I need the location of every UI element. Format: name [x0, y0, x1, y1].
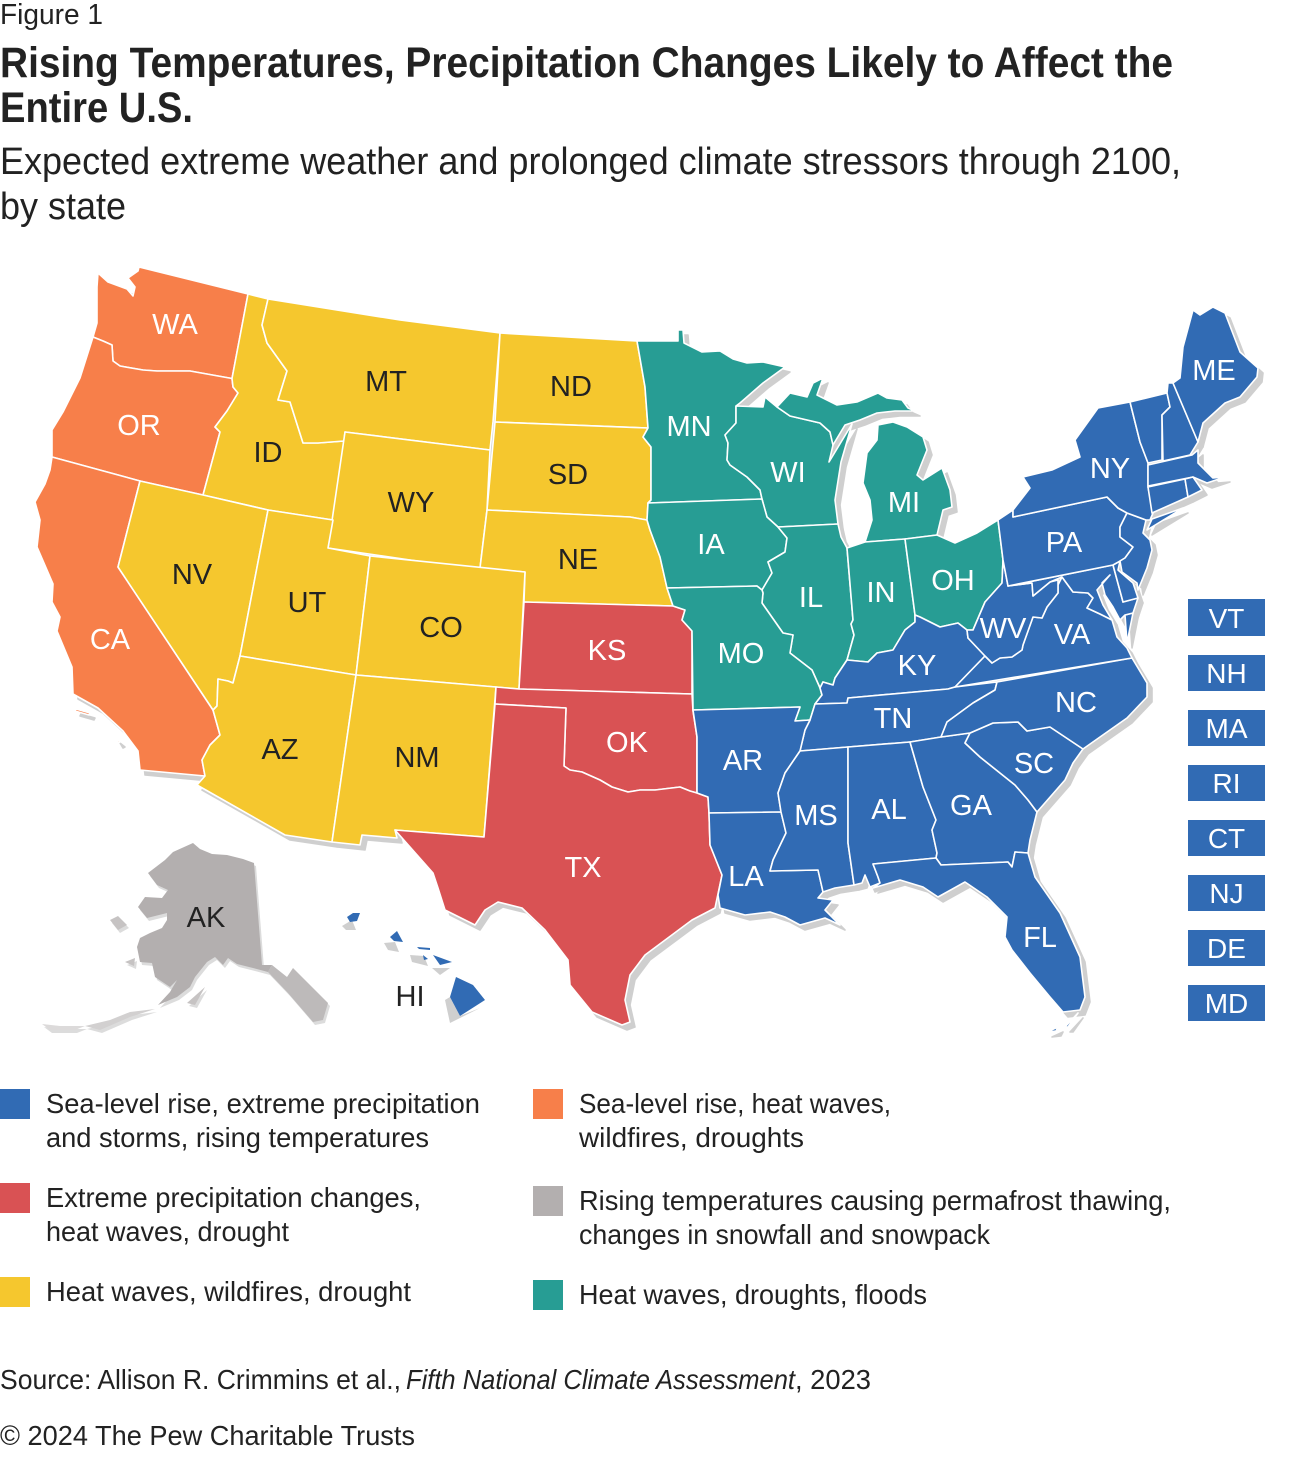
small northeast state boxes: RI [1212, 768, 1240, 799]
state labels: ME [1192, 355, 1236, 387]
state labels: MI [888, 487, 920, 519]
yellow states [118, 294, 673, 845]
legend: teal: Heat waves, droughts, floods [579, 1279, 927, 1310]
state labels: NE [558, 544, 598, 576]
legend: orange: wildfires, droughts [578, 1122, 804, 1153]
contiguous states [35, 267, 1258, 1032]
state labels: IN [866, 577, 896, 609]
state labels: MO [718, 638, 764, 670]
small northeast state boxes: MD [1205, 988, 1248, 1019]
state labels: VA [1054, 619, 1091, 651]
subtitle [0, 141, 1181, 228]
state labels: IA [697, 529, 725, 561]
small northeast state boxes [1188, 599, 1265, 1021]
state labels: TX [564, 852, 602, 884]
legend: red: Extreme precipitation changes, [46, 1182, 421, 1213]
small northeast state boxes: DE [1207, 933, 1246, 964]
state labels: GA [950, 790, 993, 822]
legend: blue [0, 1088, 480, 1153]
state labels: KS [588, 635, 626, 667]
legend: gray [533, 1185, 1171, 1250]
state labels: AZ [261, 734, 299, 766]
blue states [693, 307, 1258, 1032]
state labels: MT [365, 366, 407, 398]
orange states [35, 267, 248, 776]
state labels [90, 309, 1236, 1013]
state labels: ND [550, 371, 592, 403]
subtitle: by state [0, 186, 126, 228]
small northeast state boxes: VT [1209, 603, 1244, 634]
state labels: TN [874, 703, 912, 735]
state labels: WI [770, 457, 806, 489]
state labels: SC [1014, 748, 1054, 780]
title [0, 39, 1173, 132]
state labels: OR [117, 410, 161, 442]
state labels: AK [187, 902, 226, 934]
state labels: SD [548, 459, 588, 491]
state labels: NC [1055, 687, 1097, 719]
legend: red [0, 1182, 421, 1247]
legend: yellow: Heat waves, wildfires, drought [46, 1276, 411, 1307]
state labels: PA [1046, 527, 1083, 559]
state labels: NV [172, 559, 213, 591]
state labels: WY [388, 487, 434, 519]
state labels: HI [396, 981, 424, 1013]
small northeast state boxes: NH [1206, 658, 1247, 689]
legend: red: heat waves, drought [46, 1216, 289, 1247]
state labels: NY [1090, 453, 1130, 485]
state labels: CO [419, 612, 463, 644]
source note: Fifth National Climate Assessment [406, 1364, 796, 1395]
state labels: IL [799, 582, 823, 614]
small northeast state boxes: CT [1208, 823, 1245, 854]
state labels: UT [288, 587, 327, 619]
source note [0, 1364, 871, 1395]
teal states [637, 330, 1003, 721]
state labels: LA [728, 861, 764, 893]
state labels: KY [898, 650, 936, 682]
legend: gray: changes in snowfall and snowpack [579, 1219, 991, 1250]
legend: orange: Sea-level rise, heat waves, [579, 1088, 891, 1119]
red states [395, 602, 722, 1025]
title: Rising Temperatures, Precipitation Changes Likely to Affect the [0, 39, 1173, 87]
copyright: © 2024 The Pew Charitable Trusts [0, 1420, 415, 1451]
legend: blue: Sea-level rise, extreme precipitation [46, 1088, 480, 1119]
state labels: WV [980, 613, 1027, 645]
state labels: AL [871, 794, 907, 826]
Hawaii [342, 913, 485, 1023]
state labels: WA [152, 309, 198, 341]
subtitle: Expected extreme weather and prolonged climate stressors through 2100, [0, 141, 1181, 183]
state labels: ID [254, 437, 282, 469]
map of the United States [35, 267, 1258, 1032]
state labels: MS [794, 800, 838, 832]
Alaska [42, 843, 328, 1030]
legend: blue: and storms, rising temperatures [46, 1122, 429, 1153]
source note: , 2023 [795, 1364, 871, 1395]
state labels: OK [606, 727, 649, 759]
state labels: AR [723, 745, 763, 777]
legend [0, 1088, 1171, 1310]
legend: orange [533, 1088, 891, 1153]
legend: gray: Rising temperatures causing permafrost thawing, [579, 1185, 1171, 1216]
state labels: OH [931, 565, 975, 597]
title: Entire U.S. [0, 84, 193, 132]
state labels: MN [666, 411, 712, 443]
state labels: CA [90, 624, 131, 656]
state labels: FL [1023, 922, 1057, 954]
source note: Source: Allison R. Crimmins et al., [0, 1364, 401, 1395]
small northeast state boxes: NJ [1209, 878, 1244, 909]
small northeast state boxes: MA [1206, 713, 1248, 744]
state labels: NM [394, 742, 440, 774]
